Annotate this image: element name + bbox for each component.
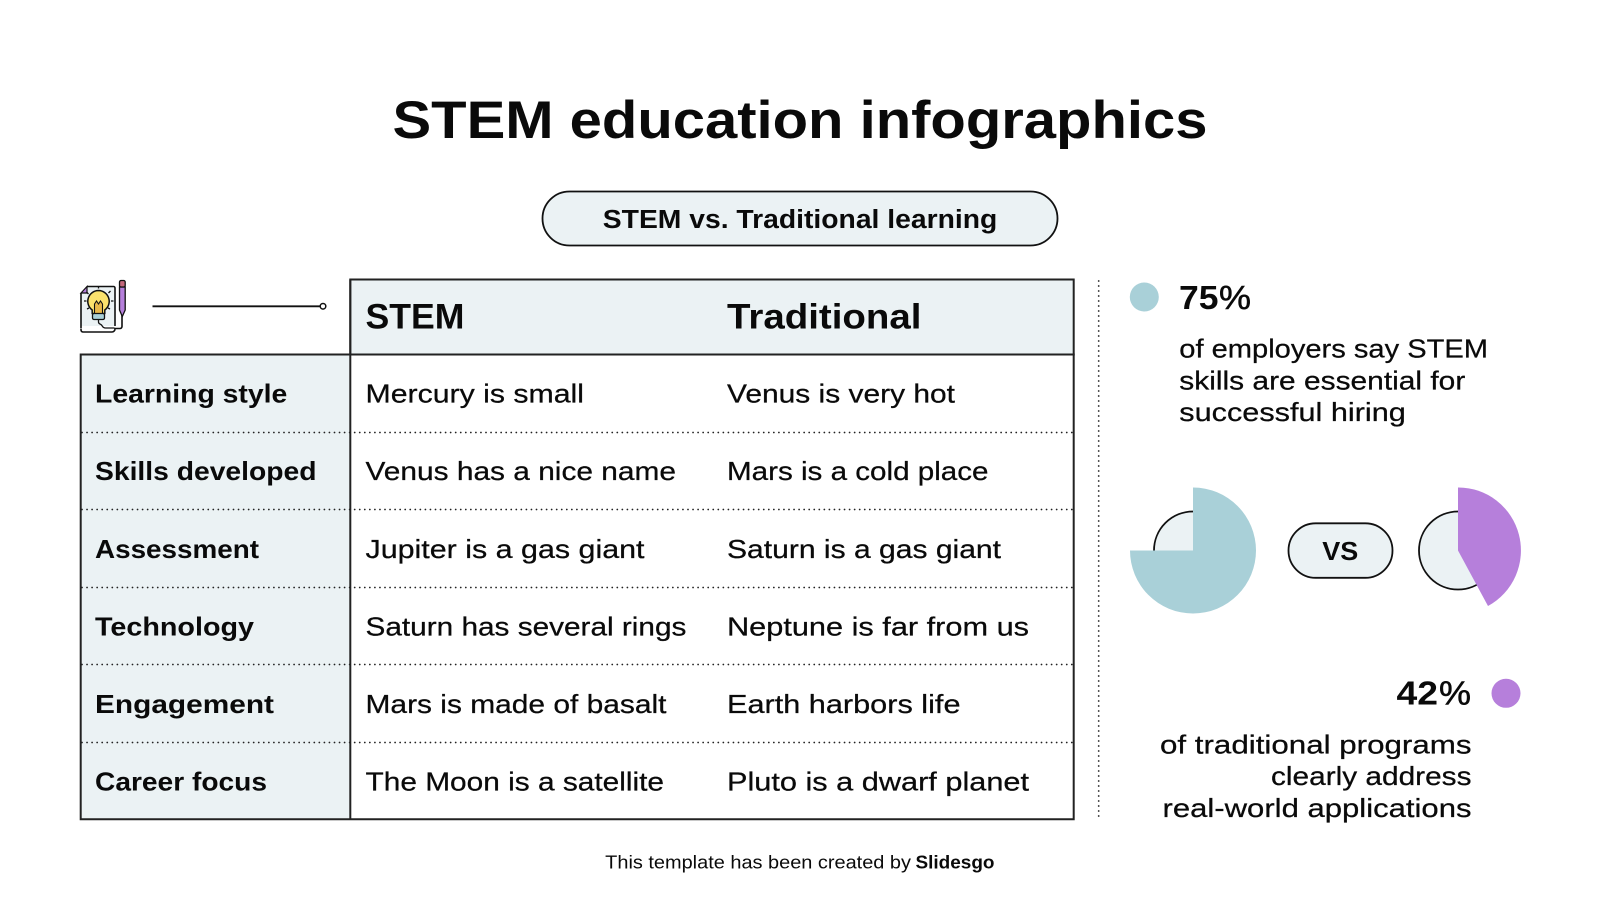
stat description bbox=[1179, 333, 1488, 427]
table frame bbox=[81, 280, 1074, 819]
row: Assessment: Saturn is a gas giant bbox=[727, 534, 1002, 564]
row: Technology bbox=[95, 612, 1029, 642]
legend dot: purple bbox=[1492, 679, 1520, 708]
stat description bbox=[1160, 729, 1472, 823]
row: Technology: Saturn has several rings bbox=[366, 612, 686, 642]
row label column background bbox=[81, 354, 350, 819]
VS pill: VS bbox=[1322, 536, 1358, 566]
stat: 42% of traditional programs bbox=[1160, 674, 1520, 823]
row: Assessment: Jupiter is a gas giant bbox=[366, 534, 645, 564]
row: Assessment bbox=[95, 534, 1002, 564]
row: Career focus bbox=[95, 767, 1030, 797]
subtitle pill: STEM vs. Traditional learning bbox=[603, 206, 997, 234]
stat value 75%: 75 bbox=[1179, 279, 1218, 316]
stat value 42%: 42 bbox=[1396, 674, 1438, 712]
stat description: skills are essential for bbox=[1179, 365, 1466, 395]
row: Assessment: Assessment bbox=[95, 534, 259, 564]
row: Skills developed: Skills developed bbox=[95, 456, 316, 486]
row: Learning style: Venus is very hot bbox=[727, 379, 956, 409]
row: Engagement: Engagement bbox=[95, 689, 274, 719]
stat: 75% of employers bbox=[1130, 279, 1488, 427]
subtitle pill bbox=[542, 192, 1058, 246]
icon: light bulb on paper with pencil bbox=[81, 280, 125, 332]
legend dot: teal bbox=[1130, 282, 1159, 312]
table header band bbox=[350, 280, 1074, 354]
row: Technology: Technology bbox=[95, 612, 255, 642]
row: Engagement bbox=[95, 689, 960, 719]
row: Skills developed: Mars is a cold place bbox=[727, 456, 988, 486]
footer credit: Slidesgo bbox=[916, 852, 995, 872]
pie chart: 42% purple bbox=[1419, 487, 1521, 606]
title: STEM education infographics bbox=[392, 91, 1208, 150]
row: Technology: Neptune is far from us bbox=[727, 612, 1029, 642]
stat value 75% bbox=[1179, 279, 1251, 316]
row: Engagement: Mars is made of basalt bbox=[366, 689, 667, 719]
row: Learning style: Mercury is small bbox=[366, 379, 584, 409]
table header band: Traditional bbox=[727, 297, 922, 336]
table header band: STEM bbox=[366, 297, 464, 336]
row: Learning style: Learning style bbox=[95, 379, 287, 409]
row: Career focus: Pluto is a dwarf planet bbox=[727, 767, 1030, 797]
stat value 42% bbox=[1396, 674, 1471, 712]
row: Career focus: The Moon is a satellite bbox=[366, 767, 664, 797]
footer credit: This template has been created by bbox=[605, 852, 911, 872]
stat value 42%: % bbox=[1439, 674, 1471, 712]
stat description: of employers say STEM bbox=[1179, 333, 1488, 363]
stat description: successful hiring bbox=[1179, 397, 1406, 427]
row: Learning style bbox=[95, 379, 956, 409]
stat description: clearly address bbox=[1271, 761, 1472, 791]
pie chart: 75% teal bbox=[1130, 488, 1256, 614]
row: Career focus: Career focus bbox=[95, 767, 267, 797]
stat description: of traditional programs bbox=[1160, 729, 1472, 759]
stat description: real-world applications bbox=[1162, 793, 1472, 823]
row: Skills developed bbox=[95, 456, 988, 486]
stat value 75%: % bbox=[1219, 279, 1251, 316]
VS pill bbox=[1288, 523, 1392, 578]
comparison table bbox=[81, 280, 1074, 819]
row: Engagement: Earth harbors life bbox=[727, 689, 960, 719]
connector line with end circle bbox=[152, 304, 326, 309]
row: Skills developed: Venus has a nice name bbox=[366, 456, 676, 486]
